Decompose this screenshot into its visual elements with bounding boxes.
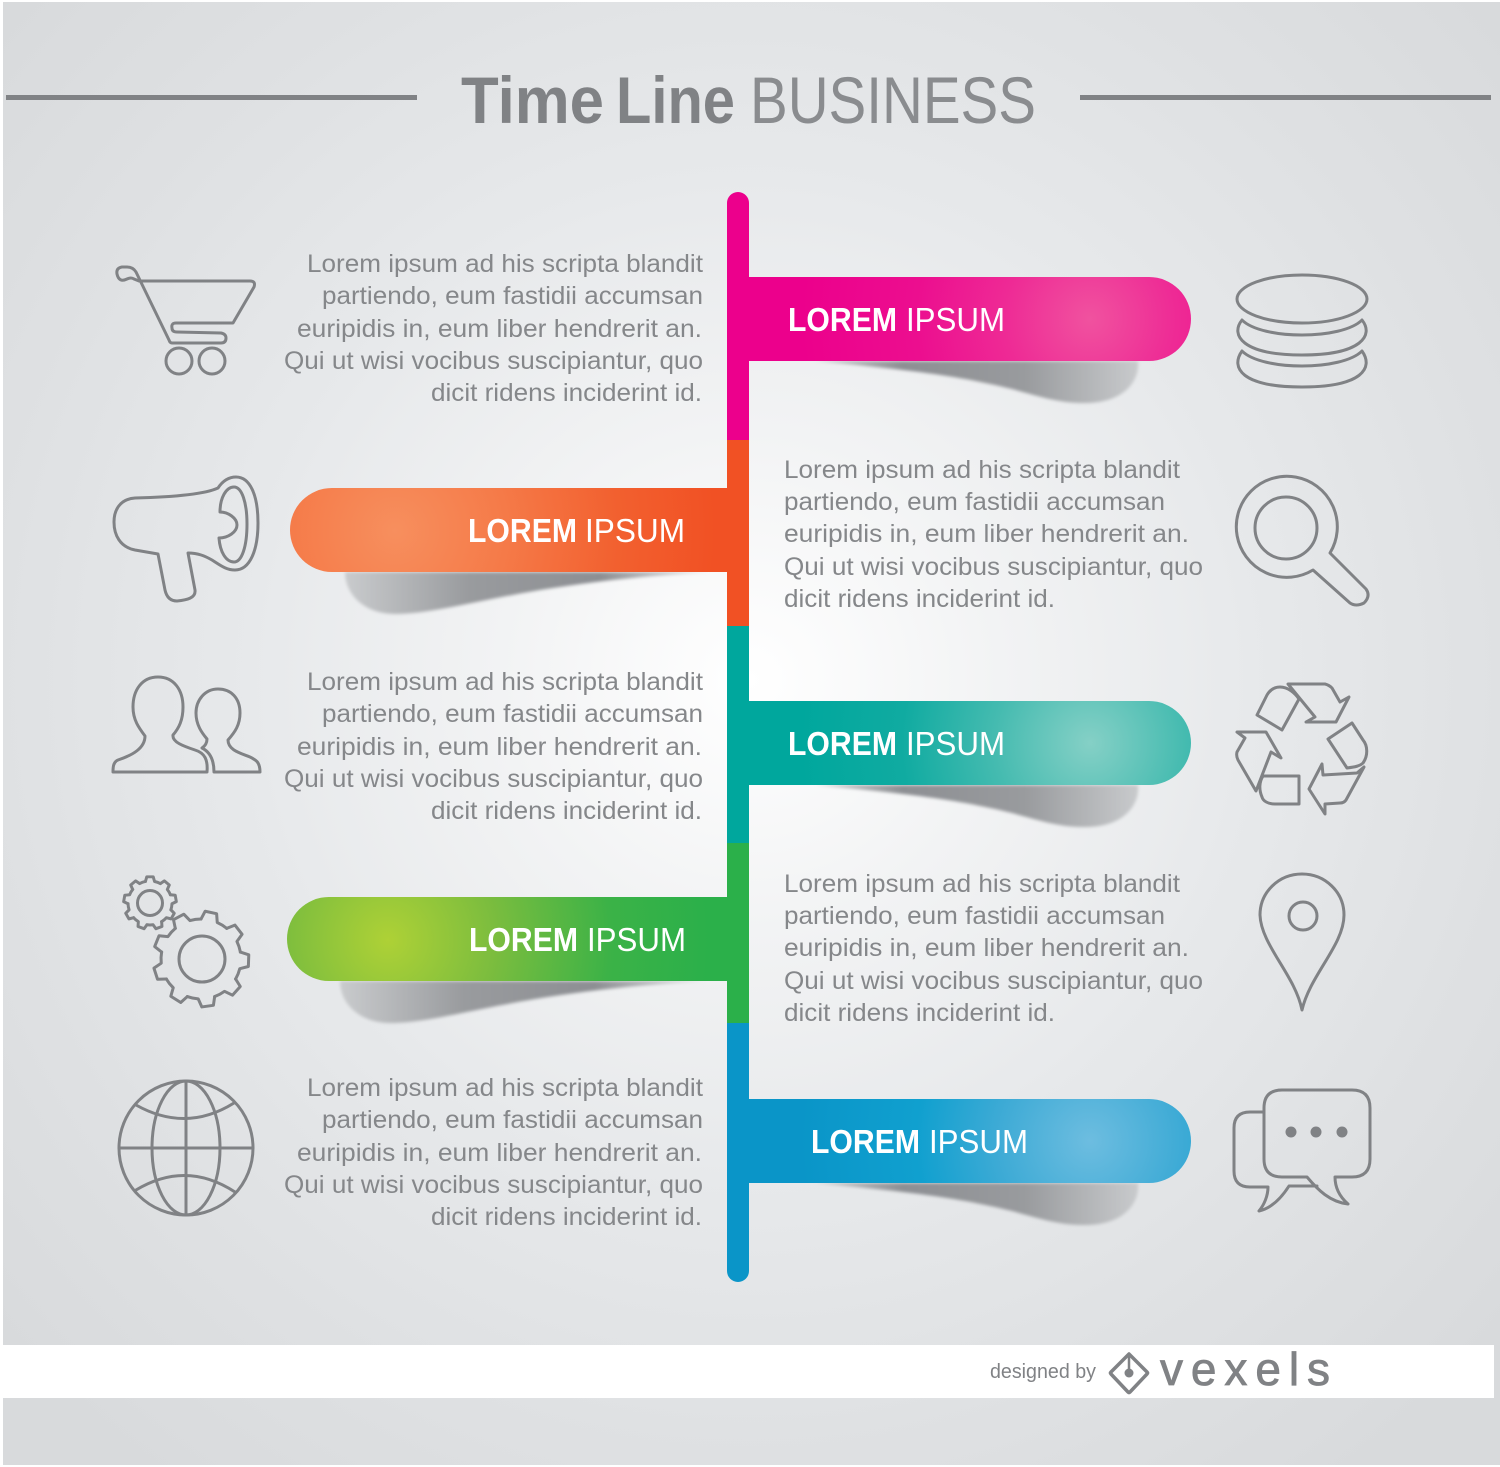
shadow: pink banner — [815, 361, 1138, 403]
text block 3: partiendo, eum fastidii accumsan — [322, 700, 703, 728]
text block 2: Lorem ipsum ad his scripta blandit — [784, 456, 1180, 484]
text block 5: dicit ridens inciderint id. — [431, 1203, 702, 1231]
shadow: blue banner — [815, 1183, 1138, 1225]
text block 2: partiendo, eum fastidii accumsan — [784, 488, 1165, 516]
banner: pink: IPSUM — [906, 301, 1005, 338]
text block 1: Qui ut wisi vocibus suscipiantur, quo — [284, 347, 703, 375]
text block 4: Qui ut wisi vocibus suscipiantur, quo — [784, 967, 1203, 995]
icon: gears — [122, 876, 260, 1019]
text block 4: euripidis in, eum liber hendrerit an. — [784, 934, 1189, 962]
shadow: green banner — [340, 981, 705, 1023]
banner: teal: IPSUM — [906, 725, 1005, 762]
banner: pink — [749, 277, 1191, 361]
banner: teal: LOREM — [788, 725, 897, 762]
text block 4: Lorem ipsum ad his scripta blandit — [784, 870, 1180, 898]
title: BUSINESS — [750, 63, 1036, 137]
timeline spine — [727, 192, 749, 1282]
banner: orange — [290, 488, 727, 572]
banner: teal — [749, 701, 1191, 785]
text block 5 — [284, 1074, 703, 1231]
title — [461, 63, 1036, 137]
text block 5: Lorem ipsum ad his scripta blandit — [307, 1074, 703, 1102]
icon: globe — [119, 1081, 253, 1215]
text block 4 — [784, 870, 1203, 1027]
icon: people — [113, 677, 260, 772]
icon: map pin — [1260, 874, 1344, 1010]
text block 3: Lorem ipsum ad his scripta blandit — [307, 668, 703, 696]
text block 2: dicit ridens inciderint id. — [784, 585, 1055, 613]
text block 1: euripidis in, eum liber hendrerit an. — [297, 315, 702, 343]
banner: blue — [749, 1099, 1191, 1183]
text block 2: euripidis in, eum liber hendrerit an. — [784, 520, 1189, 548]
footer credit: vexels — [1160, 1343, 1330, 1395]
text block 2 — [784, 456, 1203, 613]
text block 5: Qui ut wisi vocibus suscipiantur, quo — [284, 1171, 703, 1199]
text block 4: partiendo, eum fastidii accumsan — [784, 902, 1165, 930]
text block 1: dicit ridens inciderint id. — [431, 379, 702, 407]
text block 3: euripidis in, eum liber hendrerit an. — [297, 733, 702, 761]
banner: orange: LOREM — [468, 512, 577, 549]
icon: chat bubbles — [1234, 1090, 1370, 1211]
shadow: orange banner — [345, 572, 710, 614]
banner: green: IPSUM — [587, 921, 686, 958]
text block 4: dicit ridens inciderint id. — [784, 999, 1055, 1027]
banner: green — [287, 897, 727, 981]
text block 5: euripidis in, eum liber hendrerit an. — [297, 1139, 702, 1167]
text block 2: Qui ut wisi vocibus suscipiantur, quo — [784, 553, 1203, 581]
text block 1 — [284, 250, 703, 407]
text block 5: partiendo, eum fastidii accumsan — [322, 1106, 703, 1134]
footer credit: designed by — [990, 1361, 1096, 1383]
icon: megaphone — [114, 477, 258, 601]
footer band — [3, 1345, 1494, 1398]
text block 3: dicit ridens inciderint id. — [431, 797, 702, 825]
shadow: teal banner — [815, 785, 1138, 827]
icon: magnifier — [1236, 476, 1368, 605]
text block 3 — [284, 668, 703, 825]
banner: blue: LOREM — [811, 1123, 920, 1160]
banner: pink: LOREM — [788, 301, 897, 338]
banner: blue: IPSUM — [929, 1123, 1028, 1160]
footer credit — [990, 1343, 1330, 1395]
title: Time — [461, 63, 604, 137]
icon: shopping cart — [117, 267, 254, 374]
text block 1: Lorem ipsum ad his scripta blandit — [307, 250, 703, 278]
icon: database — [1237, 275, 1367, 387]
text block 1: partiendo, eum fastidii accumsan — [322, 282, 703, 310]
text block 3: Qui ut wisi vocibus suscipiantur, quo — [284, 765, 703, 793]
icon: recycle — [1237, 684, 1367, 814]
banner: green: LOREM — [469, 921, 578, 958]
banner: orange: IPSUM — [585, 512, 685, 549]
title: Line — [616, 63, 735, 137]
